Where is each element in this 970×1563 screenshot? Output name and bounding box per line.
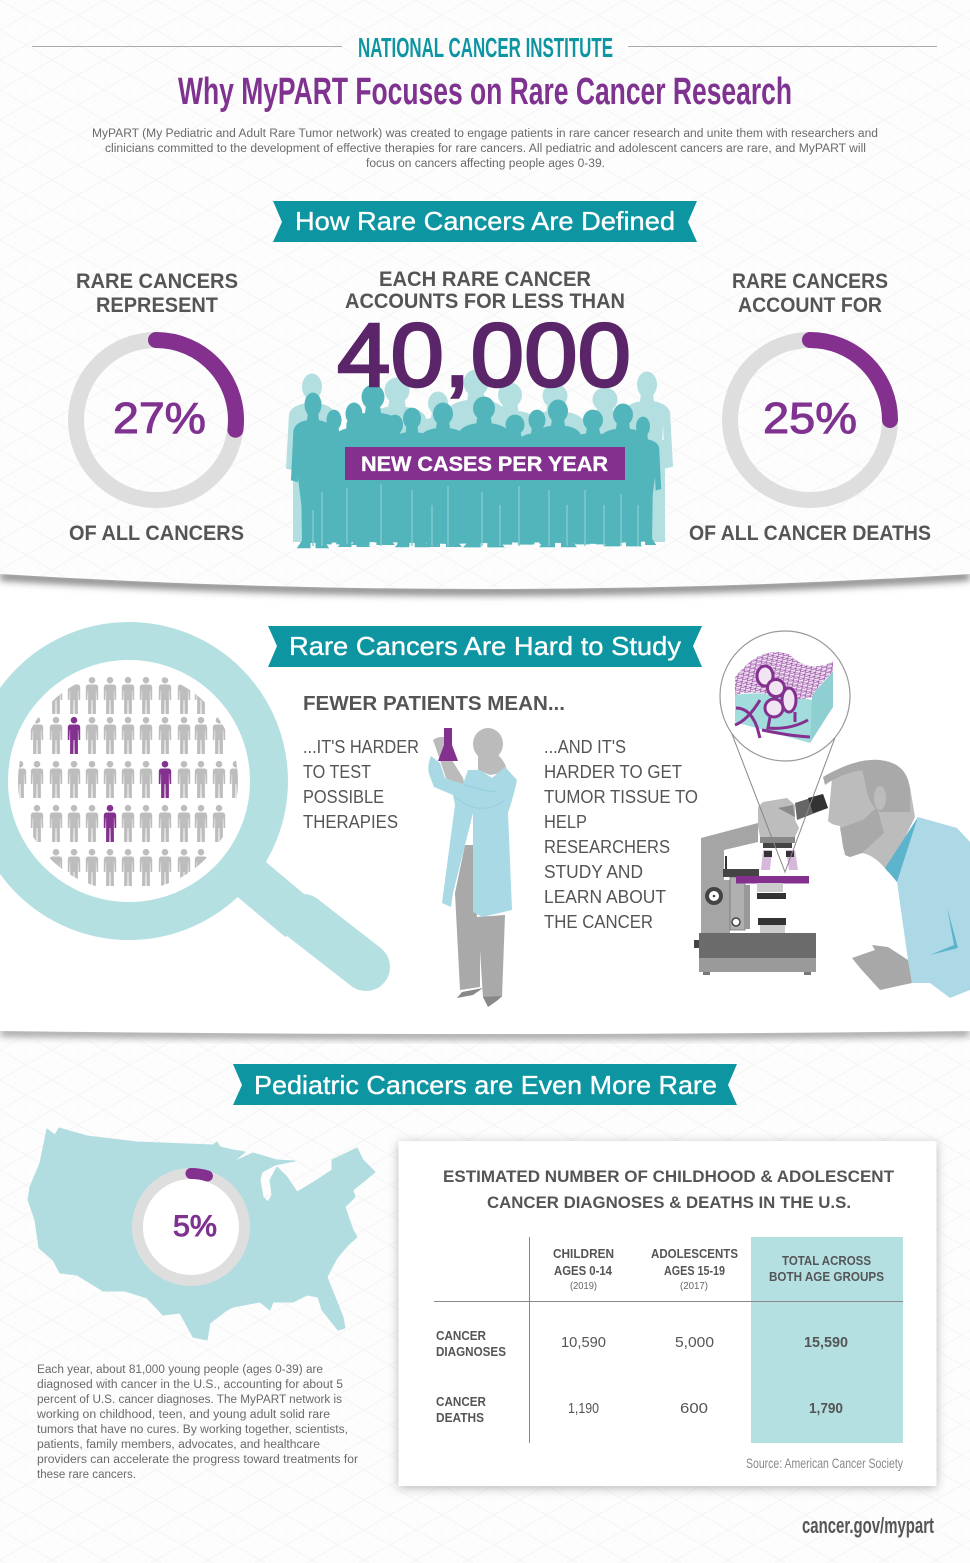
text block: harder to get tumor tissue: TUMOR TISSUE TO	[544, 787, 698, 807]
microscope	[694, 794, 828, 975]
text block: harder to get tumor tissue: ...AND IT'S	[544, 737, 626, 757]
text block: harder to test therapies	[303, 737, 419, 832]
text block: young people paragraph	[36, 1364, 358, 1481]
magnified tissue circle	[720, 631, 850, 761]
icon: magnifying glass with people	[0, 641, 366, 967]
intro paragraph	[92, 128, 878, 170]
big number: 40,000	[337, 306, 631, 406]
text block: young people paragraph: Each year, about 81,000 young people (ages 0-39) are	[37, 1364, 323, 1376]
stat: 27% of all cancers: RARE CANCERS	[76, 270, 238, 293]
text block: young people paragraph: percent of U.S. cancer diagnoses. The MyPART network is	[37, 1394, 342, 1406]
stat: 25% of all cancer deaths	[689, 270, 931, 545]
banner: How Rare Cancers Are Defined: How Rare Cancers Are Defined	[295, 206, 675, 236]
banner: Pediatric Cancers are Even More Rare: Pediatric Cancers are Even More Rare	[254, 1070, 717, 1100]
text block: young people paragraph: working on childhood, teen, and young adult solid rare	[36, 1409, 330, 1421]
row: cancer diagnoses: 5,000	[675, 1334, 714, 1351]
icon: flask	[438, 728, 458, 761]
text block: harder to get tumor tissue: LEARN ABOUT	[544, 887, 666, 907]
table title: ESTIMATED NUMBER OF CHILDHOOD & ADOLESCENT	[443, 1167, 895, 1186]
stat: 27% of all cancers: OF ALL CANCERS	[69, 522, 244, 545]
panel: middle section bottom edge	[0, 1000, 970, 1035]
text block: harder to test therapies: TO TEST	[303, 762, 371, 782]
row: cancer diagnoses: 15,590	[804, 1334, 848, 1351]
column headers: AGES 15-19	[664, 1264, 725, 1278]
crowd silhouette: back row	[286, 369, 673, 543]
text block: young people paragraph: diagnosed with cancer in the U.S., accounting for about 5	[37, 1379, 343, 1391]
stat: 25% of all cancer deaths: 25%	[763, 394, 857, 443]
panel: diagnoses and deaths table	[398, 1141, 936, 1486]
row: cancer deaths: CANCER	[436, 1395, 486, 1409]
table title	[443, 1167, 895, 1212]
magnifier cone	[720, 700, 849, 872]
pictogram people in lens	[14, 677, 242, 886]
map: United States with 5% donut	[28, 1128, 375, 1340]
illustration: scientist at microscope	[694, 631, 970, 998]
column headers: CHILDREN	[553, 1247, 614, 1261]
row: cancer deaths: 1,190	[568, 1400, 599, 1417]
column headers	[553, 1247, 884, 1292]
stat: 27% of all cancers	[69, 270, 244, 545]
column headers: ADOLESCENTS	[651, 1247, 738, 1261]
scientist collar	[885, 817, 918, 882]
row: cancer deaths	[436, 1395, 843, 1425]
scientist head	[823, 760, 915, 872]
illustration: researcher with flask	[428, 728, 517, 1007]
banner: How Rare Cancers Are Defined	[273, 201, 697, 242]
text block: young people paragraph: these rare cancers.	[37, 1469, 136, 1481]
donut chart 27%	[76, 340, 236, 500]
row: cancer diagnoses: 10,590	[561, 1334, 606, 1351]
stat: 40,000 new cases per year	[286, 268, 673, 548]
column headers: (2017)	[680, 1281, 708, 1292]
organisation name: NATIONAL CANCER INSTITUTE	[358, 32, 613, 63]
text block: harder to get tumor tissue: STUDY AND	[544, 862, 643, 882]
column headers: BOTH AGE GROUPS	[769, 1270, 884, 1284]
text block: young people paragraph: patients, family members, advocates, and healthcare	[37, 1439, 320, 1451]
column headers: AGES 0-14	[554, 1264, 612, 1278]
table title: CANCER DIAGNOSES & DEATHS IN THE U.S.	[487, 1193, 851, 1212]
donut chart 5%	[138, 1173, 244, 1280]
intro paragraph: MyPART (My Pediatric and Adult Rare Tumor network) was created to engage patients in rare cancer research and unite them with researchers and	[92, 128, 878, 140]
row: cancer diagnoses	[436, 1329, 848, 1359]
donut chart 25%	[730, 340, 890, 500]
header rule	[32, 46, 937, 47]
text block: harder to get tumor tissue: THE CANCER	[544, 912, 653, 932]
stat: 40,000 new cases per year: EACH RARE CANCER	[379, 268, 591, 291]
scientist coat	[897, 817, 970, 998]
intro paragraph: clinicians committed to the development of effective therapies for rare cancers. All pediatric and adolescent cancers are rare, and MyPART will	[105, 143, 866, 155]
text block: harder to get tumor tissue: HELP	[544, 812, 587, 832]
text block: harder to test therapies: POSSIBLE	[303, 787, 384, 807]
banner: Pediatric Cancers are Even More Rare	[233, 1064, 737, 1105]
text block: young people paragraph: providers can accelerate the progress toward treatments for	[37, 1454, 358, 1466]
stat: 25% of all cancer deaths: RARE CANCERS	[732, 270, 888, 293]
column headers: TOTAL ACROSS	[782, 1254, 871, 1268]
stat: 27% of all cancers: 27%	[113, 394, 206, 443]
row: cancer diagnoses: DIAGNOSES	[436, 1345, 506, 1359]
crowd silhouette: front row	[291, 384, 661, 548]
stat: 40,000 new cases per year: ACCOUNTS FOR LESS THAN	[345, 290, 625, 313]
heading: fewer patients mean: FEWER PATIENTS MEAN...	[303, 693, 565, 715]
scientist hand	[852, 945, 912, 990]
text block: harder to get tumor tissue: RESEARCHERS	[544, 837, 670, 857]
row: cancer deaths: 1,790	[809, 1400, 843, 1417]
banner: Rare Cancers Are Hard to Study	[268, 626, 702, 667]
stat: 25% of all cancer deaths: ACCOUNT FOR	[738, 294, 882, 317]
label: new cases per year	[345, 447, 625, 480]
stat: 25% of all cancer deaths: OF ALL CANCER DEATHS	[689, 522, 931, 545]
text block: harder to test therapies: THERAPIES	[303, 812, 398, 832]
banner: Rare Cancers Are Hard to Study: Rare Cancers Are Hard to Study	[289, 631, 681, 661]
intro paragraph: focus on cancers affecting people ages 0-39.	[366, 158, 605, 170]
row: cancer deaths: DEATHS	[436, 1411, 484, 1425]
column headers: (2019)	[570, 1281, 597, 1292]
row: cancer deaths: 600	[680, 1400, 708, 1417]
text block: harder to test therapies: ...IT'S HARDER	[303, 737, 419, 757]
source note: Source: American Cancer Society	[746, 1455, 903, 1471]
label: new cases per year: NEW CASES PER YEAR	[361, 453, 608, 476]
donut chart 5%: 5%	[173, 1210, 217, 1243]
text block: harder to get tumor tissue	[544, 737, 698, 932]
row: cancer diagnoses: CANCER	[436, 1329, 486, 1343]
highlighted total column	[751, 1237, 903, 1443]
panel: middle section background	[0, 0, 970, 1033]
text block: harder to get tumor tissue: HARDER TO GET	[544, 762, 682, 782]
stat: 27% of all cancers: REPRESENT	[96, 294, 218, 317]
text block: young people paragraph: tumors that have no cures. By working together, scientists,	[37, 1424, 348, 1436]
